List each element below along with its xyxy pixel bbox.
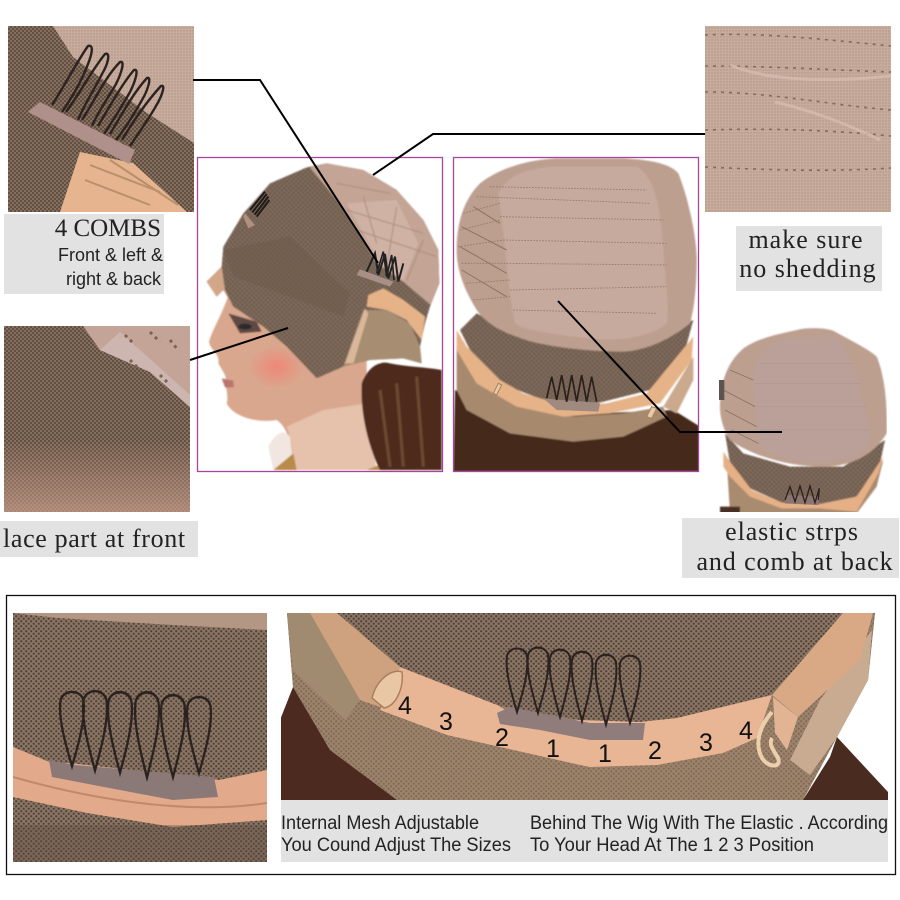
close-up: comb on strap bbox=[13, 613, 267, 862]
icon: comb bbox=[52, 46, 163, 146]
caption: adjustable mesh instructions bbox=[281, 800, 888, 862]
label: 4 combs bbox=[4, 214, 164, 294]
caption: adjustable mesh instructions: To Your Head At The 1 2 3 Position bbox=[530, 835, 814, 856]
leader line: comb bbox=[193, 80, 378, 263]
lace base silhouette bbox=[207, 163, 439, 378]
strap position numbers: 3 bbox=[699, 729, 713, 757]
caption: adjustable mesh instructions: Behind The Wig With The Elastic . According bbox=[530, 813, 888, 834]
icon: comb teeth bbox=[507, 648, 640, 725]
strap position numbers: 2 bbox=[495, 724, 509, 752]
silk top bbox=[310, 163, 439, 305]
label: 4 combs: Front & left & bbox=[58, 245, 163, 265]
strap position numbers: 4 bbox=[398, 692, 412, 720]
strap position numbers: 1 bbox=[546, 735, 560, 763]
right strap bbox=[772, 613, 873, 717]
strap position numbers bbox=[398, 692, 753, 768]
label: elastic straps and comb bbox=[682, 517, 899, 578]
mesh band bbox=[460, 313, 693, 403]
caption: adjustable mesh instructions: You Cound Adjust The Sizes bbox=[281, 835, 511, 856]
lower lace bbox=[457, 347, 667, 442]
panel: adjustable strap section bbox=[6, 596, 896, 874]
under lace bbox=[727, 460, 883, 513]
label: elastic straps and comb: and comb at back bbox=[696, 547, 894, 576]
label: elastic straps and comb: elastic strps bbox=[725, 517, 859, 546]
strap position numbers: 3 bbox=[439, 708, 453, 736]
panel: elastic strap back view bbox=[718, 328, 887, 515]
silk dome bbox=[457, 158, 697, 352]
panel: wig side view bbox=[198, 158, 442, 472]
label: make sure no shedding: no shedding bbox=[739, 254, 877, 283]
leader line: elastic strap bbox=[558, 301, 782, 432]
label: lace part at front: lace part at front bbox=[3, 524, 186, 553]
comb bbox=[543, 398, 600, 412]
mesh band bbox=[725, 433, 885, 507]
small combs bbox=[243, 213, 255, 228]
label: 4 combs: right & back bbox=[66, 269, 162, 289]
icon: left hook bbox=[372, 671, 402, 708]
leader line: cap top bbox=[373, 134, 705, 175]
strap position numbers: 1 bbox=[598, 740, 612, 768]
label: make sure no shedding bbox=[736, 225, 882, 291]
lower lace bbox=[287, 613, 875, 800]
label: 4 combs: 4 COMBS bbox=[55, 215, 161, 242]
panel: wig inside view bbox=[453, 158, 700, 472]
panel: cap material close-up bbox=[705, 26, 891, 212]
elastic strap bbox=[457, 330, 693, 417]
left strap bbox=[310, 613, 400, 707]
comb base bbox=[28, 102, 135, 164]
close-up: numbered strap bbox=[280, 613, 888, 800]
strap position numbers: 2 bbox=[648, 737, 662, 765]
icon: comb teeth bbox=[60, 691, 211, 777]
mannequin head bbox=[208, 297, 368, 454]
panel: comb close-up bbox=[8, 26, 194, 212]
panel: lace part close-up bbox=[4, 326, 190, 512]
hair bbox=[453, 390, 700, 472]
elastic band bbox=[380, 667, 772, 767]
upper mesh bbox=[337, 613, 843, 722]
label: make sure no shedding: make sure bbox=[748, 225, 864, 254]
elastic strap bbox=[723, 452, 883, 512]
icon: right hook bbox=[758, 697, 798, 766]
silk dome bbox=[720, 328, 887, 467]
caption: adjustable mesh instructions: Internal Mesh Adjustable bbox=[281, 813, 479, 834]
leader line: lace front bbox=[190, 328, 288, 360]
lower lace bbox=[343, 310, 422, 367]
hair bbox=[280, 687, 397, 800]
strap position numbers: 4 bbox=[739, 717, 753, 745]
